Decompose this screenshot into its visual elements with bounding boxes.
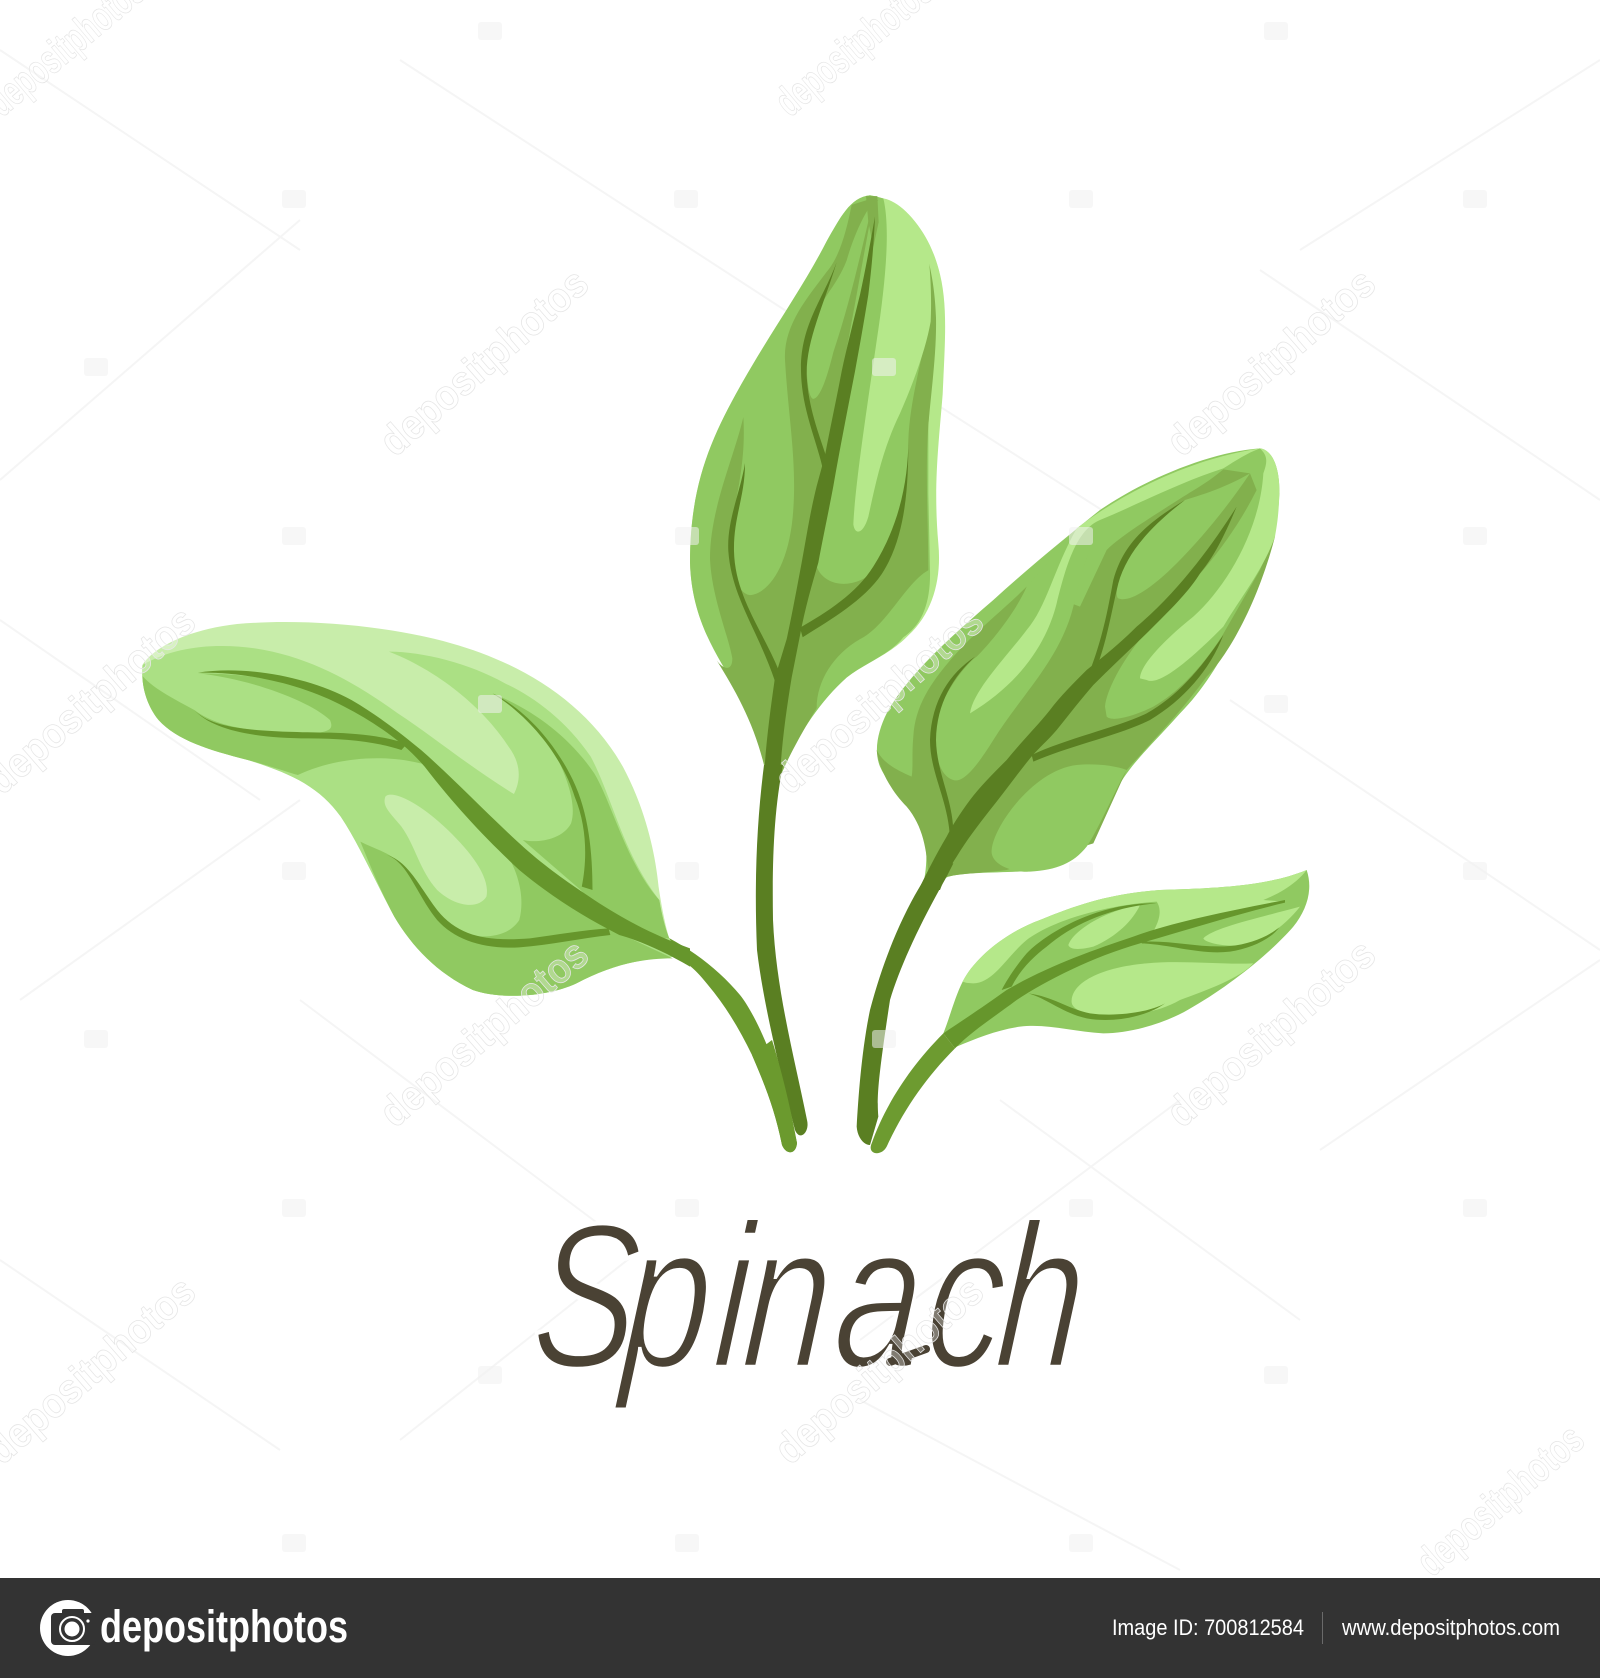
centre leaf inner patches xyxy=(817,198,931,584)
leaf: upper right leaf xyxy=(877,448,1279,890)
logo wordmark: depositphotos xyxy=(100,1601,348,1652)
centre leaf highlight xyxy=(853,198,939,532)
left leaf blade xyxy=(142,622,690,996)
leaf: left large leaf xyxy=(142,622,797,1152)
watermark: repeating depositphotos text: depositphotos xyxy=(765,597,992,803)
watermark: repeating depositphotos text: depositphotos xyxy=(370,259,597,465)
small leaf blade xyxy=(943,870,1309,1047)
right leaf main vein xyxy=(918,507,1237,890)
icon: camera logo xyxy=(40,1600,96,1656)
watermark: repeating depositphotos text: depositphotos xyxy=(1157,930,1384,1136)
image id: Image ID: 700812584 xyxy=(1112,1615,1304,1640)
website url: www.depositphotos.com xyxy=(1341,1615,1560,1640)
leaf: centre upright leaf xyxy=(690,195,945,1135)
left stem overlap at the base xyxy=(752,1040,797,1152)
watermark: small camera marks xyxy=(84,22,1487,1552)
watermark: repeating depositphotos text: depositphotos xyxy=(765,1267,992,1473)
leaf: small lower right leaf xyxy=(857,863,1309,1153)
small leaf side veins xyxy=(1002,903,1157,990)
left leaf side veins xyxy=(194,710,407,750)
left leaf shaded bands xyxy=(142,676,426,775)
small leaf highlights xyxy=(963,870,1307,983)
centre leaf side veins xyxy=(801,262,837,471)
watermark: repeating depositphotos text: depositphotos xyxy=(370,930,597,1136)
right leaf inner patches xyxy=(935,520,1103,780)
centre leaf blade xyxy=(690,195,945,777)
right leaf highlights xyxy=(970,448,1260,713)
right leaf side veins xyxy=(1088,500,1185,675)
footer bar xyxy=(0,1578,1600,1678)
centre leaf main vein xyxy=(764,216,875,777)
right leaf blade xyxy=(877,448,1279,890)
title: Spinach: Spinach xyxy=(527,1180,1093,1411)
left leaf stem xyxy=(640,925,797,1152)
small leaf stem xyxy=(871,1033,955,1153)
centre leaf stem xyxy=(756,765,808,1135)
right leaf stem xyxy=(857,863,953,1145)
watermark: repeating depositphotos text: depositphotos xyxy=(1157,259,1384,465)
small leaf main vein xyxy=(943,900,1285,1048)
left leaf main vein xyxy=(198,670,690,967)
